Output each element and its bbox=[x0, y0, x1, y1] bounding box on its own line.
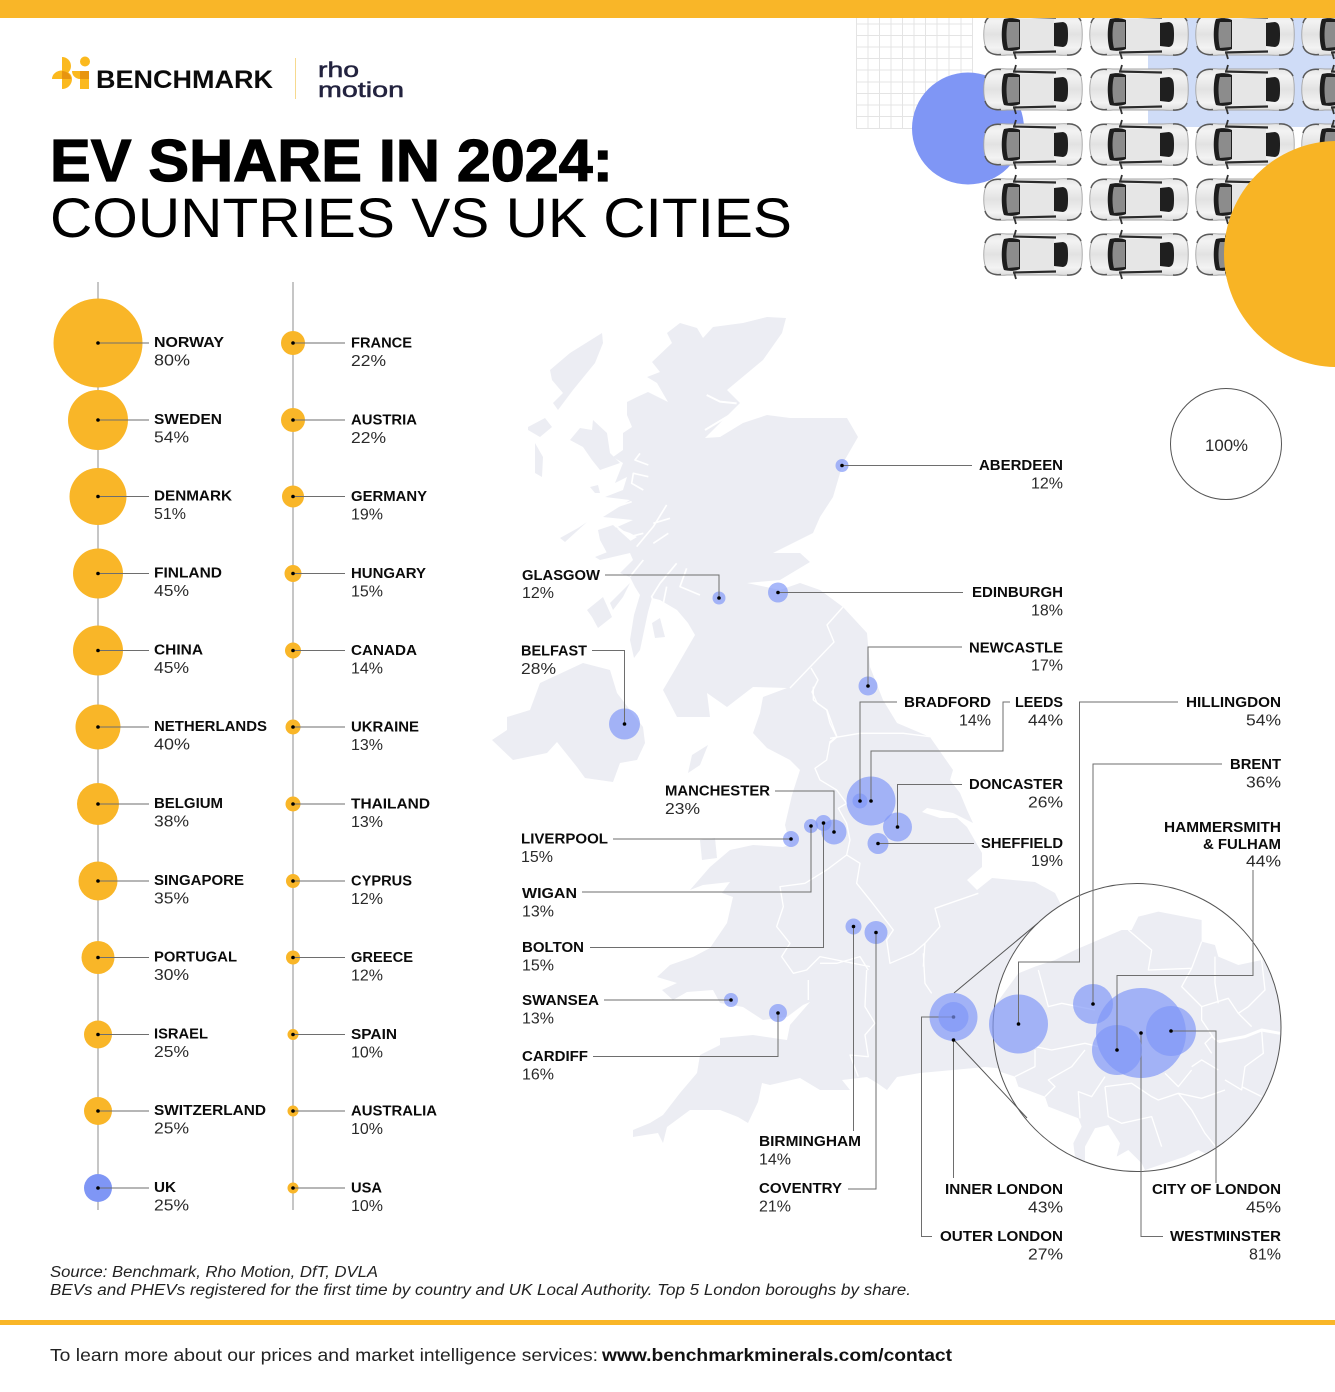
Australia 10%: 10% bbox=[351, 1121, 383, 1138]
city: Wigan 13% bbox=[522, 819, 818, 920]
footer rule bbox=[0, 1320, 1335, 1325]
city: Sheffield 19%: 19% bbox=[1031, 853, 1063, 870]
Sweden 54% bbox=[68, 390, 222, 450]
Denmark 51%: 51% bbox=[154, 506, 186, 523]
Singapore 35% bbox=[78, 862, 244, 908]
panel: countries column 2 bbox=[281, 282, 438, 1215]
city: Bolton 15% bbox=[522, 815, 832, 974]
city: Inner London 43%: INNER LONDON bbox=[945, 1182, 1063, 1198]
Austria 22%: 22% bbox=[351, 430, 386, 447]
footer call to action bbox=[50, 1345, 952, 1365]
city: Aberdeen 12%: ABERDEEN bbox=[979, 458, 1063, 474]
Switzerland 25%: 25% bbox=[154, 1120, 189, 1138]
borough: Hillingdon 54%: 54% bbox=[1246, 712, 1281, 730]
city: Doncaster 26% bbox=[883, 777, 1064, 842]
Finland 45%: 45% bbox=[154, 583, 189, 600]
borough: Westminster 81%: WESTMINSTER bbox=[1170, 1229, 1282, 1245]
city: Belfast 28% bbox=[521, 644, 640, 740]
scale reference: 100% circle bbox=[1170, 388, 1282, 500]
France 22%: 22% bbox=[351, 353, 386, 370]
city: Glasgow 12% bbox=[522, 568, 726, 604]
UK 25%: UK bbox=[154, 1180, 177, 1196]
city: Coventry 21%: 21% bbox=[759, 1198, 791, 1216]
footer call to action: To learn more about our prices and market intelligence services: bbox=[50, 1345, 598, 1365]
city: Newcastle 17% bbox=[858, 640, 1063, 696]
Sweden 54%: 54% bbox=[154, 430, 189, 446]
Norway 80%: NORWAY bbox=[154, 335, 224, 351]
city: Aberdeen 12%: 12% bbox=[1031, 476, 1063, 492]
Portugal 30%: 30% bbox=[154, 967, 189, 984]
borough: Hammersmith and Fulham 44%: 44% bbox=[1246, 854, 1281, 870]
city: Swansea 13%: SWANSEA bbox=[522, 993, 600, 1009]
map: United Kingdom bbox=[492, 298, 1090, 1143]
city: Birmingham 14%: 14% bbox=[759, 1152, 791, 1168]
Thailand 13%: THAILAND bbox=[351, 796, 430, 812]
city: Liverpool 15%: 15% bbox=[521, 849, 553, 866]
borough: City of London 45% bbox=[1146, 1006, 1281, 1216]
city: Cardiff 16%: 16% bbox=[522, 1066, 554, 1084]
logo: Benchmark bbox=[52, 56, 273, 94]
decorative header collage bbox=[0, 0, 1335, 367]
Cyprus 12% bbox=[286, 874, 412, 908]
Switzerland 25% bbox=[84, 1097, 266, 1138]
China 45%: 45% bbox=[154, 660, 189, 677]
Canada 14%: 14% bbox=[351, 660, 383, 678]
Spain 10%: SPAIN bbox=[351, 1027, 397, 1043]
title bbox=[50, 128, 792, 249]
Sweden 54%: SWEDEN bbox=[154, 412, 222, 428]
Ukraine 13% bbox=[286, 720, 419, 754]
city: Glasgow 12%: 12% bbox=[522, 585, 554, 602]
borough: Hammersmith and Fulham 44%: HAMMERSMITH bbox=[1164, 820, 1281, 836]
inset connector lines bbox=[954, 923, 1038, 1118]
west coast inlets bbox=[617, 298, 770, 617]
borough: Hillingdon 54% bbox=[989, 695, 1281, 1054]
borough: Brent 36%: BRENT bbox=[1230, 757, 1281, 773]
car fleet bbox=[984, 10, 1335, 279]
Belgium 38%: 38% bbox=[154, 814, 189, 830]
Spain 10%: 10% bbox=[351, 1044, 383, 1062]
city: Outer London 27%: OUTER LONDON bbox=[940, 1229, 1063, 1245]
city: Liverpool 15%: LIVERPOOL bbox=[521, 832, 608, 848]
Finland 45%: FINLAND bbox=[154, 566, 222, 582]
inset: London boroughs map bbox=[985, 884, 1285, 1172]
Hungary 15%: 15% bbox=[351, 584, 383, 600]
regional boundaries bbox=[777, 607, 978, 1077]
Cyprus 12%: CYPRUS bbox=[351, 874, 412, 890]
borough: Brent 36%: 36% bbox=[1246, 774, 1281, 792]
Greece 12%: 12% bbox=[351, 968, 383, 984]
France 22%: FRANCE bbox=[351, 336, 412, 352]
city: Bolton 15%: BOLTON bbox=[522, 940, 584, 956]
city: Leeds 44%: LEEDS bbox=[1015, 695, 1063, 711]
Hungary 15% bbox=[284, 565, 426, 600]
Ukraine 13%: 13% bbox=[351, 737, 383, 754]
Thailand 13%: 13% bbox=[351, 814, 383, 831]
logo: rho motion bbox=[295, 58, 404, 102]
logo: rho motion: rho bbox=[318, 59, 359, 82]
city: Belfast 28%: 28% bbox=[521, 661, 556, 678]
city: Liverpool 15% bbox=[521, 831, 799, 866]
city: Sheffield 19%: SHEFFIELD bbox=[981, 836, 1063, 852]
borough: City of London 45%: CITY OF LONDON bbox=[1152, 1182, 1281, 1198]
city: Inner London 43% bbox=[938, 1002, 1063, 1216]
Norway 80% bbox=[54, 298, 224, 388]
city: Manchester 23% bbox=[665, 784, 846, 844]
city: Coventry 21% bbox=[759, 921, 888, 1216]
UK 25%: 25% bbox=[154, 1198, 189, 1214]
USA 10% bbox=[288, 1180, 383, 1215]
Austria 22%: AUSTRIA bbox=[351, 412, 418, 428]
source note bbox=[50, 1264, 911, 1299]
city: Cardiff 16%: CARDIFF bbox=[522, 1049, 588, 1065]
borough: Hillingdon 54%: HILLINGDON bbox=[1186, 695, 1281, 711]
city: Outer London 27% bbox=[922, 993, 1063, 1264]
city: Manchester 23%: MANCHESTER bbox=[665, 784, 771, 800]
Ukraine 13%: UKRAINE bbox=[351, 720, 419, 736]
Finland 45% bbox=[73, 548, 222, 600]
Germany 19%: 19% bbox=[351, 506, 383, 524]
city: Edinburgh 18%: 18% bbox=[1031, 602, 1063, 620]
borough: Hammersmith and Fulham 44%: & FULHAM bbox=[1203, 837, 1281, 853]
source note: BEVs and PHEVs registered for the first time by country and UK Local Authority. Top 5 London boroughs by share. bbox=[50, 1282, 911, 1299]
borough: City of London 45%: 45% bbox=[1246, 1200, 1281, 1216]
Netherlands 40% bbox=[76, 704, 267, 754]
city: Birmingham 14%: BIRMINGHAM bbox=[759, 1134, 861, 1150]
borough: Westminster 81%: 81% bbox=[1249, 1246, 1281, 1264]
Singapore 35%: SINGAPORE bbox=[154, 873, 244, 889]
borough: Brent 36% bbox=[1073, 757, 1281, 1024]
Austria 22% bbox=[281, 408, 418, 447]
city: Cardiff 16% bbox=[522, 1004, 787, 1084]
scale reference: 100% circle: 100% bbox=[1205, 437, 1248, 455]
France 22% bbox=[281, 331, 412, 370]
Australia 10% bbox=[288, 1104, 438, 1138]
city: Doncaster 26%: 26% bbox=[1028, 794, 1063, 812]
title: EV SHARE IN 2024: bbox=[50, 128, 613, 194]
Thailand 13% bbox=[286, 796, 430, 831]
Netherlands 40%: 40% bbox=[154, 736, 190, 754]
logo: Benchmark: BENCHMARK bbox=[96, 66, 273, 94]
city: Manchester 23%: 23% bbox=[665, 801, 700, 818]
Hungary 15%: HUNGARY bbox=[351, 566, 426, 582]
city: Swansea 13% bbox=[522, 993, 738, 1028]
Greece 12% bbox=[286, 950, 413, 984]
city: Inner London 43%: 43% bbox=[1028, 1200, 1063, 1216]
Canada 14% bbox=[285, 642, 418, 678]
Israel 25%: ISRAEL bbox=[154, 1026, 208, 1042]
Cyprus 12%: 12% bbox=[351, 891, 383, 908]
borough: Hammersmith and Fulham 44% bbox=[1092, 820, 1281, 1075]
USA 10%: 10% bbox=[351, 1198, 383, 1215]
source note: Source: Benchmark, Rho Motion, DfT, DVLA bbox=[50, 1264, 378, 1281]
Portugal 30%: PORTUGAL bbox=[154, 950, 237, 966]
city: Bradford 14%: BRADFORD bbox=[904, 695, 991, 711]
Greece 12%: GREECE bbox=[351, 950, 413, 966]
Israel 25%: 25% bbox=[154, 1044, 189, 1061]
city: Newcastle 17%: NEWCASTLE bbox=[969, 640, 1063, 656]
city: Doncaster 26%: DONCASTER bbox=[969, 777, 1064, 793]
Netherlands 40%: NETHERLANDS bbox=[154, 719, 267, 735]
Portugal 30% bbox=[82, 941, 237, 984]
city: Sheffield 19% bbox=[868, 833, 1063, 870]
footer call to action: www.benchmarkminerals.com/contact bbox=[601, 1345, 952, 1365]
city: Leeds 44%: 44% bbox=[1028, 712, 1063, 730]
city: Wigan 13%: 13% bbox=[522, 904, 554, 920]
city: Wigan 13%: WIGAN bbox=[522, 886, 577, 902]
Germany 19% bbox=[282, 486, 427, 524]
city: Edinburgh 18% bbox=[768, 582, 1063, 620]
Singapore 35%: 35% bbox=[154, 890, 189, 908]
Australia 10%: AUSTRALIA bbox=[351, 1104, 438, 1120]
Spain 10% bbox=[288, 1027, 397, 1062]
city: Belfast 28%: BELFAST bbox=[521, 644, 587, 660]
city: Glasgow 12%: GLASGOW bbox=[522, 568, 600, 584]
Denmark 51% bbox=[70, 468, 233, 525]
Scottish islands bbox=[528, 333, 717, 860]
city: Swansea 13%: 13% bbox=[522, 1010, 554, 1028]
Norway 80%: 80% bbox=[154, 352, 190, 370]
panel: countries column 1 bbox=[54, 282, 267, 1214]
city: Aberdeen 12% bbox=[836, 458, 1063, 492]
city: Birmingham 14% bbox=[759, 918, 862, 1168]
city: Bradford 14% bbox=[852, 695, 991, 808]
Belgium 38%: BELGIUM bbox=[154, 796, 223, 812]
city: Edinburgh 18%: EDINBURGH bbox=[972, 585, 1063, 601]
title: COUNTRIES VS UK CITIES bbox=[50, 186, 792, 249]
logo: rho motion: motion bbox=[318, 79, 404, 102]
Israel 25% bbox=[84, 1020, 208, 1061]
Germany 19%: GERMANY bbox=[351, 489, 427, 505]
Canada 14%: CANADA bbox=[351, 643, 418, 659]
city: Leeds 44% bbox=[846, 695, 1063, 826]
China 45%: CHINA bbox=[154, 642, 204, 658]
city: Bolton 15%: 15% bbox=[522, 958, 554, 974]
Switzerland 25%: SWITZERLAND bbox=[154, 1103, 266, 1119]
city: Outer London 27%: 27% bbox=[1028, 1246, 1063, 1264]
Belgium 38% bbox=[77, 783, 223, 830]
China 45% bbox=[73, 626, 204, 677]
borough: Westminster 81% bbox=[1096, 988, 1282, 1264]
city: Bradford 14%: 14% bbox=[959, 712, 991, 730]
city: Newcastle 17%: 17% bbox=[1031, 658, 1063, 674]
UK 25% bbox=[84, 1174, 189, 1214]
Denmark 51%: DENMARK bbox=[154, 488, 233, 504]
USA 10%: USA bbox=[351, 1180, 383, 1196]
city: Coventry 21%: COVENTRY bbox=[759, 1181, 842, 1197]
